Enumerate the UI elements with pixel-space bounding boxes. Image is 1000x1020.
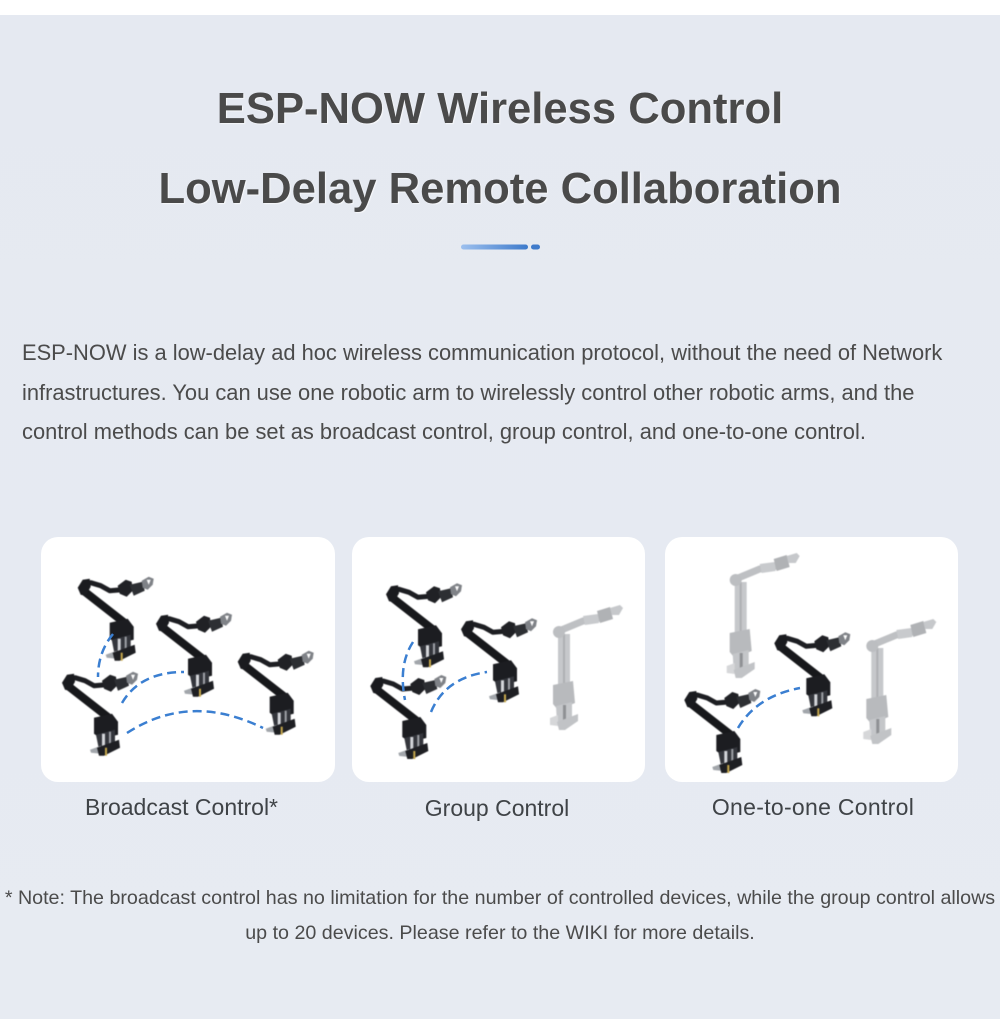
title line 1: ESP-NOW Wireless Control xyxy=(217,85,783,133)
broadcast wireless links xyxy=(98,634,263,733)
footnote: * Note: The broadcast control has no limitation for the number of controlled devices, while the group control allows xyxy=(5,887,995,909)
broadcast arms xyxy=(62,577,314,756)
panel: one-to-one control card xyxy=(665,537,958,782)
intro paragraph: infrastructures. You can use one robotic arm to wirelessly control other robotic arms, and the xyxy=(22,380,914,405)
group wireless links xyxy=(403,642,487,712)
intro paragraph: control methods can be set as broadcast control, group control, and one-to-one control. xyxy=(22,419,866,444)
intro paragraph xyxy=(22,340,942,444)
caption: one-to-one control: One-to-one Control xyxy=(712,794,914,820)
intro paragraph: ESP-NOW is a low-delay ad hoc wireless communication protocol, without the need of Network xyxy=(22,340,942,365)
caption: group control: Group Control xyxy=(425,795,569,821)
title accent divider xyxy=(461,244,540,250)
one-to-one wireless link xyxy=(738,688,800,728)
group arms xyxy=(370,583,623,759)
title line 2: Low-Delay Remote Collaboration xyxy=(158,165,842,213)
footnote: up to 20 devices. Please refer to the WIKI for more details. xyxy=(245,922,755,944)
footnote xyxy=(5,887,995,944)
caption: broadcast control: Broadcast Control* xyxy=(85,794,278,820)
panel: group control card xyxy=(352,537,645,782)
one-to-one arms xyxy=(684,553,936,773)
panel: broadcast control card xyxy=(41,537,335,782)
